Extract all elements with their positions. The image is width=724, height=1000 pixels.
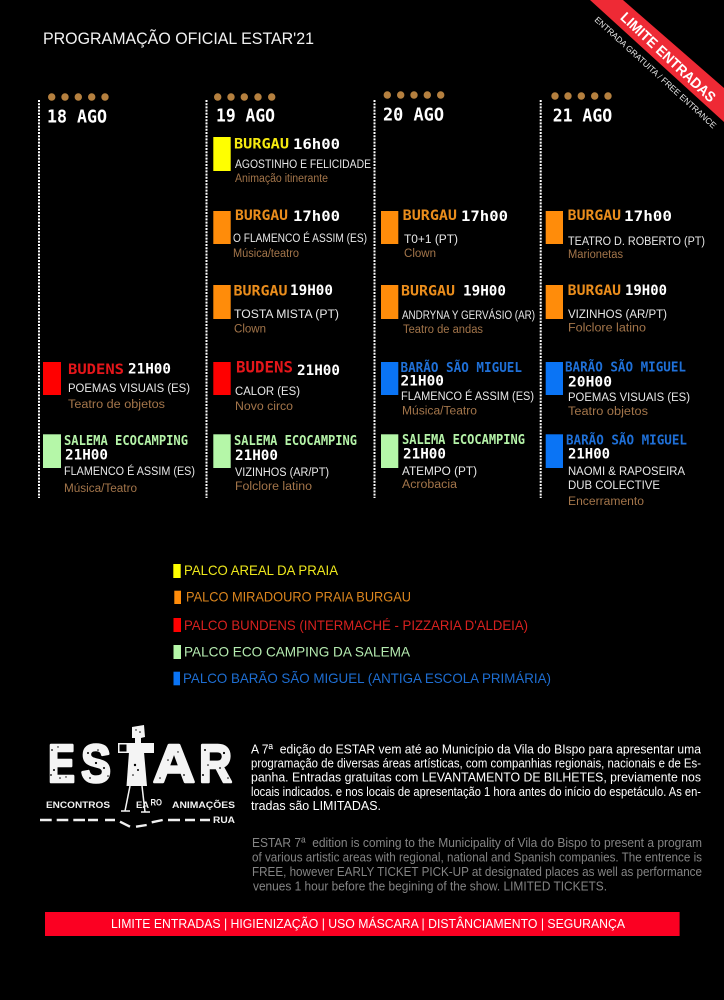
legend item: Areal da Praia: PALCO AREAL DA PRAIA (184, 562, 339, 578)
text block: English description: venues 1 hour before the begining of the show. LIMITED TICKETS. (253, 880, 607, 894)
event: Flamenco é assim: Música/Teatro (64, 483, 137, 495)
logo subtitle (46, 798, 235, 826)
panel: 20 AGO (381, 91, 535, 491)
event: Teatro D. Roberto: 17h00 (624, 209, 672, 225)
event: Vizinhos (546, 283, 667, 335)
event: Naomi & Raposeira (546, 432, 687, 508)
event: Agostinho e Felicidade: 16h00 (293, 137, 340, 153)
date heading: 20 AGO (383, 105, 444, 126)
legend: stages (173, 562, 551, 686)
event: Teatro D. Roberto (546, 208, 705, 261)
logo subtitle: ENCONTROS (46, 800, 110, 811)
event: Calor: Novo circo (235, 401, 293, 413)
event: Flamenco é assim: SALEMA ECOCAMPING (64, 434, 188, 449)
icon: T figure with hat (118, 725, 154, 812)
event: Flamenco é assim: FLAMENCO É ASSIM (ES) (64, 465, 195, 478)
event: Vizinhos: Folclore latino (568, 323, 646, 335)
event: Vizinhos: SALEMA ECOCAMPING (234, 434, 357, 449)
logo subtitle: EA (136, 800, 149, 811)
event: Atempo: ATEMPO (PT) (402, 466, 477, 478)
event: Poemas Visuais (546, 360, 690, 418)
event: Naomi & Raposeira: Encerramento (568, 496, 644, 508)
day dots (551, 92, 612, 100)
event: Poemas Visuais: BUDENS (68, 362, 124, 378)
event: Andryna y Gervásio (381, 284, 535, 336)
event: Poemas Visuais (43, 362, 190, 411)
event: Tosta Mista: Clown (234, 324, 266, 336)
date heading: 19 AGO (216, 106, 275, 127)
event: Andryna y Gervásio: BURGAU (401, 284, 455, 300)
event: T0+1: T0+1 (PT) (404, 234, 458, 246)
event: Tosta Mista: 19H00 (290, 283, 333, 299)
event: Andryna y Gervásio: ANDRYNA Y GERVÁSIO (AR) (402, 309, 535, 322)
event: Poemas Visuais: 21H00 (128, 362, 171, 378)
event: Flamenco é assim: 21H00 (400, 374, 444, 390)
event: T0+1: BURGAU (403, 208, 457, 224)
event: Agostinho e Felicidade (213, 137, 371, 185)
legend item: Bundens: PALCO BUNDENS (INTERMACHÉ - PIZZARIA D'ALDEIA) (184, 617, 528, 633)
logo: ESTAR: E (48, 734, 75, 794)
title: PROGRAMAÇÃO OFICIAL ESTAR'21 (43, 29, 314, 48)
date heading: 18 AGO (47, 107, 107, 128)
event: Vizinhos (213, 434, 357, 493)
logo: ESTAR (40, 725, 235, 827)
logo: ESTAR: S (81, 734, 111, 794)
legend item: Eco Camping da Salema: PALCO ECO CAMPING DA SALEMA (184, 644, 411, 660)
logo: ESTAR: A (153, 734, 195, 794)
event: Flamenco é assim: FLAMENCO É ASSIM (ES) (401, 390, 534, 403)
event: O Flamenco é assim: Música/teatro (233, 248, 299, 260)
legend item: Miradouro Praia Burgau: PALCO MIRADOURO PRAIA BURGAU (186, 589, 411, 605)
text block: English description (252, 836, 702, 894)
event: Atempo (381, 433, 525, 491)
corner ribbon: limite entradas: LIMITE ENTRADAS (617, 10, 719, 106)
event: Calor: CALOR (ES) (235, 386, 300, 398)
text block: English description: of various artistic areas with regional, national and Spanish companies. The entrence is (252, 851, 702, 865)
logo subtitle: RUA (213, 815, 235, 826)
day dots (384, 91, 444, 99)
panel: 18 AGO (43, 93, 195, 495)
event: Vizinhos: Folclore latino (235, 481, 312, 493)
event: Vizinhos: 21H00 (235, 448, 278, 464)
event: Naomi & Raposeira: DUB COLECTIVE (568, 480, 660, 492)
event: Vizinhos: VIZINHOS (AR/PT) (235, 467, 329, 479)
event: Teatro D. Roberto: TEATRO D. ROBERTO (PT) (568, 236, 705, 248)
logo subtitle: ANIMAÇÕES (172, 800, 235, 811)
event: Naomi & Raposeira: 21H00 (568, 447, 610, 463)
event: Teatro D. Roberto: BURGAU (568, 208, 621, 224)
event: Poemas Visuais: Teatro objetos (568, 406, 648, 418)
event: Atempo: SALEMA ECOCAMPING (402, 433, 525, 448)
panel: 21 AGO (546, 92, 705, 508)
text block: English description: FREE, however EARLY TICKET PICK-UP at designated places as well as performance (252, 865, 702, 879)
event: Poemas Visuais: 20H00 (568, 375, 612, 391)
event: Poemas Visuais: Teatro de objetos (68, 399, 165, 411)
event: Flamenco é assim (381, 360, 534, 418)
footer banner: LIMITE ENTRADAS | HIGIENIZAÇÃO | USO MÁSCARA | DISTÂNCIAMENTO | SEGURANÇA (111, 916, 625, 931)
event: Andryna y Gervásio: 19H00 (463, 284, 506, 300)
event: T0+1: 17h00 (461, 209, 508, 225)
event: Tosta Mista (213, 283, 339, 336)
event: Calor (213, 358, 340, 413)
event: Vizinhos: 19H00 (625, 283, 667, 299)
event: T0+1: Clown (404, 248, 436, 260)
event: O Flamenco é assim: O FLAMENCO É ASSIM (ES) (233, 232, 367, 245)
event: Poemas Visuais: POEMAS VISUAIS (ES) (68, 383, 190, 395)
footer banner (45, 912, 680, 936)
text block: English description: ESTAR 7ª edition is coming to the Municipality of Vila do Bispo to present a program (252, 836, 702, 850)
event: Naomi & Raposeira: NAOMI & RAPOSEIRA (568, 466, 685, 478)
event: Andryna y Gervásio: Teatro de andas (403, 324, 483, 336)
legend item: Barão São Miguel: PALCO BARÃO SÃO MIGUEL (ANTIGA ESCOLA PRIMÁRIA) (183, 670, 551, 686)
event: T0+1 (381, 208, 508, 260)
event: Tosta Mista: TOSTA MISTA (PT) (234, 309, 339, 321)
event: Tosta Mista: BURGAU (234, 284, 288, 300)
event: Agostinho e Felicidade: AGOSTINHO E FELICIDADE (235, 159, 371, 171)
text block: Portuguese description: tradas são LIMITADAS. (251, 799, 381, 813)
event: Flamenco é assim: Música/Teatro (402, 406, 477, 418)
event: Teatro D. Roberto: Marionetas (568, 249, 623, 261)
event: O Flamenco é assim (213, 208, 367, 260)
event: Flamenco é assim: BARÃO SÃO MIGUEL (400, 360, 522, 376)
event: Naomi & Raposeira: BARÃO SÃO MIGUEL (566, 432, 687, 448)
logo subtitle: RO (150, 798, 162, 808)
text block: Portuguese description: A 7ª edição do ESTAR vem até ao Município da Vila do BIspo para apresentar uma (251, 742, 701, 756)
event: Calor: BUDENS (236, 358, 293, 377)
event: Flamenco é assim (43, 434, 195, 495)
date heading: 21 AGO (553, 106, 612, 127)
event: Vizinhos: BURGAU (568, 283, 621, 299)
text block: Portuguese description (251, 742, 701, 813)
event: Poemas Visuais: BARÃO SÃO MIGUEL (565, 360, 686, 376)
event: Agostinho e Felicidade: Animação itinerante (235, 173, 328, 185)
logo: ESTAR: R (199, 734, 232, 794)
corner ribbon: limite entradas: ENTRADA GRATUITA / FREE ENTRANCE (593, 15, 719, 131)
event: Agostinho e Felicidade: BURGAU (234, 137, 289, 153)
event: Atempo: 21H00 (403, 447, 446, 463)
event: Atempo: Acrobacia (402, 479, 458, 491)
day dots (214, 93, 275, 101)
event: Poemas Visuais: POEMAS VISUAIS (ES) (568, 392, 690, 404)
day dots (48, 93, 109, 101)
event: O Flamenco é assim: BURGAU (235, 208, 288, 224)
event: O Flamenco é assim: 17h00 (293, 209, 340, 225)
text block: Portuguese description: panha. Entradas gratuitas com LEVANTAMENTO DE BILHETES, previamente nos (251, 771, 701, 785)
event: Calor: 21H00 (297, 363, 340, 379)
event: Vizinhos: VIZINHOS (AR/PT) (568, 309, 667, 321)
event: Flamenco é assim: 21H00 (65, 448, 108, 464)
panel: 19 AGO (213, 93, 371, 493)
